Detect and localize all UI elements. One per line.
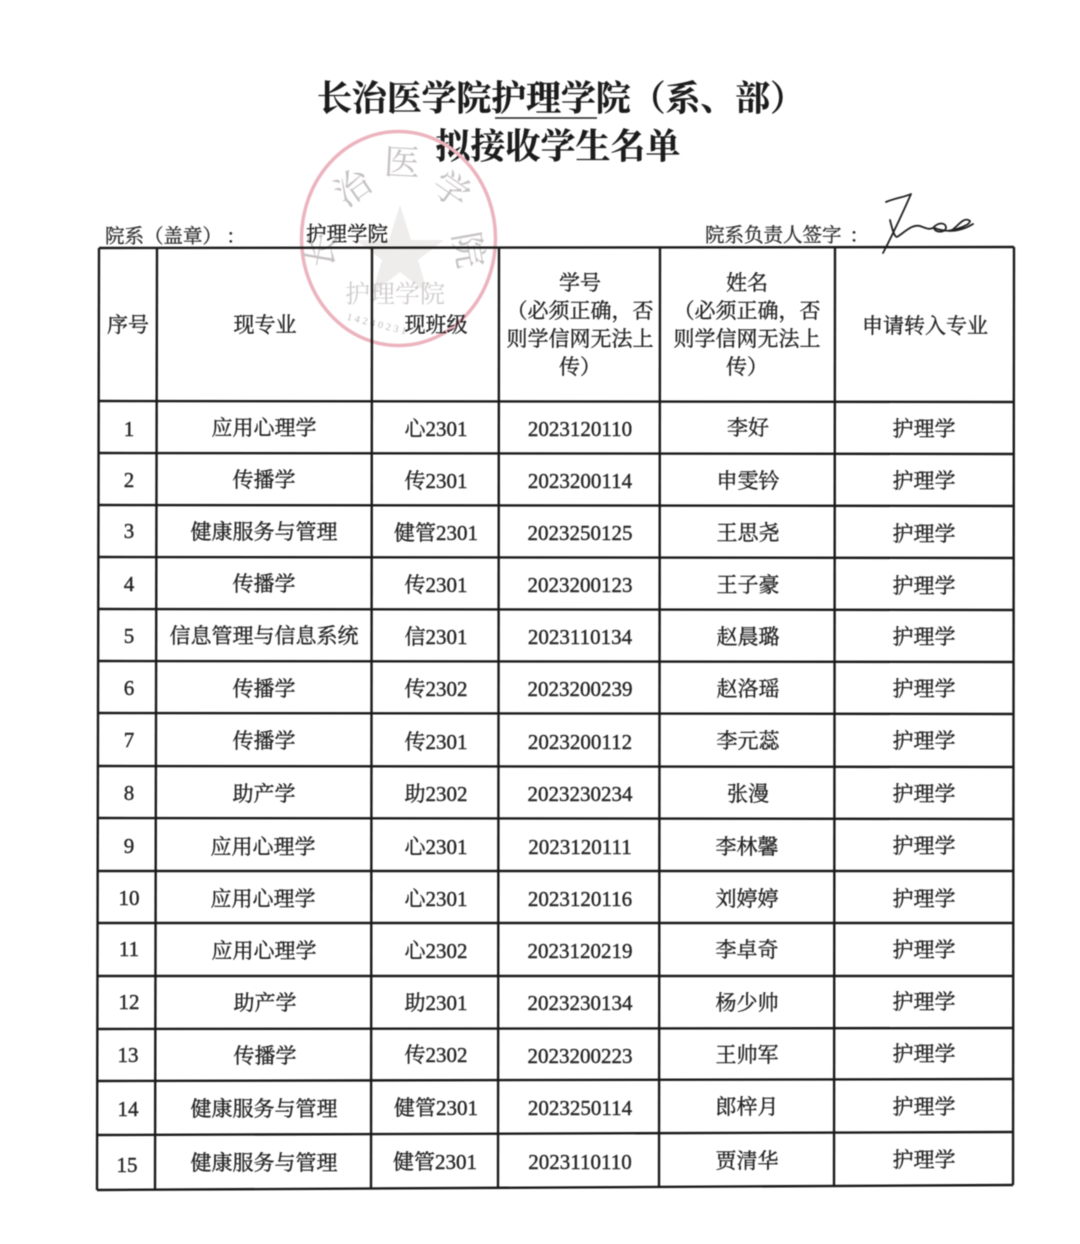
- row 9: [124, 834, 956, 859]
- row 10: 应用心理学: [210, 887, 316, 911]
- row 13: 传播学: [234, 1044, 296, 1068]
- row 2: 传播学: [232, 468, 296, 492]
- row 8: [124, 781, 956, 806]
- row 11: 11: [119, 937, 139, 961]
- row 2: [124, 468, 956, 493]
- signatory label: 院系负责人签字 ：: [705, 224, 869, 246]
- stamp: 长: [299, 229, 345, 271]
- department label: 院系（盖章） ：: [105, 226, 246, 248]
- row 3: 护理学: [892, 522, 956, 546]
- row 4: 传2301: [404, 573, 468, 597]
- row 4: 传播学: [232, 572, 296, 596]
- row 6: 护理学: [892, 677, 956, 701]
- row 8: 2023230234: [528, 782, 633, 806]
- row 11: 应用心理学: [212, 939, 316, 963]
- row 5: 信2301: [404, 625, 468, 649]
- row 9: 护理学: [892, 834, 956, 858]
- row 11: 心2302: [404, 939, 468, 963]
- row 7: 传播学: [232, 729, 296, 753]
- title: [317, 80, 805, 166]
- row 2: 2023200114: [528, 469, 633, 493]
- row 5: 信息管理与信息系统: [170, 624, 358, 648]
- stamp: 医: [383, 142, 421, 184]
- row 12: 助2301: [404, 991, 468, 1015]
- row 8: 张漫: [727, 782, 769, 806]
- row 12: 2023230134: [528, 991, 633, 1015]
- row 13: 2023200223: [528, 1044, 632, 1068]
- row 8: 助2302: [404, 782, 468, 806]
- row 11: 2023120219: [528, 939, 632, 963]
- stamp: 院: [445, 229, 491, 271]
- row 2: 2: [124, 468, 134, 492]
- table header: 学号: [559, 271, 601, 295]
- row 4: 王子豪: [716, 573, 780, 597]
- row 13: 传2302: [404, 1043, 468, 1067]
- table header: （必须正确，否: [674, 299, 820, 324]
- row 11: [119, 937, 956, 963]
- row 6: 赵洛瑶: [716, 677, 780, 701]
- row 3: 健康服务与管理: [190, 520, 338, 544]
- row 8: 8: [124, 781, 134, 805]
- row 14: 2023250114: [528, 1096, 633, 1120]
- row 12: 护理学: [892, 990, 956, 1014]
- stamp: 14240231: [346, 312, 410, 338]
- table header: 则学信网无法上: [506, 327, 654, 351]
- row 6: [124, 676, 956, 701]
- title: 拟接收学生名单: [435, 128, 681, 166]
- row 3: [124, 519, 956, 546]
- row 1: 1: [124, 417, 134, 441]
- row 9: 9: [124, 834, 134, 858]
- row 4: 护理学: [892, 574, 956, 598]
- row 6: 传播学: [232, 677, 296, 701]
- row 7: 传2301: [404, 730, 468, 754]
- row 8: 护理学: [892, 782, 956, 806]
- row 5: 赵晨璐: [716, 625, 780, 649]
- table grid: [97, 247, 1014, 1190]
- stamp: 治: [327, 161, 380, 215]
- row 1: 心2301: [404, 417, 468, 441]
- row 13: 护理学: [892, 1042, 956, 1066]
- department name: 护理学院: [306, 223, 388, 246]
- row 7: 李元蕊: [716, 729, 780, 753]
- row 9: 应用心理学: [210, 835, 316, 859]
- row 13: [118, 1042, 956, 1068]
- table header: 现班级: [404, 313, 468, 337]
- row 10: 刘婷婷: [716, 887, 778, 911]
- row 7: 2023200112: [528, 730, 632, 754]
- row 9: 李林馨: [716, 835, 778, 859]
- row 6: 2023200239: [528, 677, 632, 701]
- row 7: [124, 728, 956, 754]
- table header: 则学信网无法上: [674, 327, 820, 351]
- row 4: [124, 572, 956, 598]
- stamp: 学: [425, 163, 477, 217]
- row 10: [118, 886, 956, 911]
- row 1: 护理学: [892, 417, 956, 441]
- stamp: [299, 132, 496, 346]
- row 5: 护理学: [892, 625, 956, 649]
- row 13: 王帅军: [716, 1043, 778, 1067]
- table header: 传）: [726, 355, 768, 379]
- row 10: 2023120116: [528, 887, 632, 911]
- row 14: 郎梓月: [716, 1095, 778, 1119]
- row 15: [116, 1148, 956, 1177]
- row 3: 2023250125: [528, 521, 632, 545]
- table header: 现专业: [234, 313, 296, 337]
- row 6: 传2302: [404, 677, 468, 701]
- row 14: 健管2301: [394, 1096, 478, 1120]
- row 14: 健康服务与管理: [190, 1097, 338, 1121]
- title: 长治医学院护理学院（系、部）: [317, 80, 805, 118]
- row 11: 护理学: [892, 938, 956, 962]
- row 2: 护理学: [892, 469, 956, 493]
- row 9: 2023120111: [528, 835, 632, 859]
- row 2: 传2301: [404, 469, 468, 493]
- row 3: 3: [124, 519, 134, 543]
- row 8: 助产学: [232, 782, 296, 806]
- row 5: 2023110134: [528, 625, 633, 649]
- table header: 传）: [559, 355, 601, 379]
- row 10: 10: [118, 886, 140, 910]
- row 2: 申雯钤: [716, 469, 780, 493]
- row 4: 2023200123: [528, 573, 632, 597]
- row 11: 李卓奇: [716, 938, 778, 962]
- row 15: 健康服务与管理: [190, 1151, 338, 1175]
- row 15: 护理学: [892, 1148, 956, 1172]
- row 3: 王思尧: [716, 521, 780, 545]
- table header: 序号: [107, 313, 149, 337]
- table header: 姓名: [726, 271, 768, 295]
- row 15: 贾清华: [716, 1149, 778, 1173]
- row 12: 助产学: [234, 991, 296, 1015]
- row 1: 2023120110: [528, 417, 632, 441]
- row 15: 健管2301: [393, 1150, 477, 1174]
- row 1: 应用心理学: [212, 416, 316, 440]
- row 15: 2023110110: [528, 1150, 632, 1174]
- row 9: 心2301: [404, 835, 468, 859]
- row 15: 15: [116, 1153, 138, 1177]
- row 14: 14: [118, 1097, 139, 1121]
- row 12: 杨少帅: [716, 991, 778, 1015]
- row 3: 健管2301: [394, 521, 478, 545]
- row 5: [124, 624, 956, 649]
- row 6: 6: [124, 676, 134, 700]
- row 1: 李好: [727, 416, 769, 440]
- row 12: 12: [118, 990, 140, 1014]
- signature: [883, 194, 973, 253]
- row 12: [118, 990, 956, 1015]
- row 5: 5: [124, 624, 134, 648]
- row 7: 护理学: [892, 729, 956, 753]
- row 10: 心2301: [404, 887, 468, 911]
- table header: （必须正确，否: [506, 299, 654, 324]
- row 7: 7: [124, 728, 134, 752]
- row 14: 护理学: [892, 1095, 956, 1119]
- table header: [107, 271, 988, 379]
- row 1: [124, 416, 956, 441]
- stamp: 护理学院: [345, 280, 445, 308]
- row 10: 护理学: [892, 887, 956, 911]
- row 13: 13: [118, 1043, 138, 1067]
- row 14: [118, 1095, 956, 1121]
- row 4: 4: [124, 572, 135, 596]
- table header: 申请转入专业: [862, 314, 988, 338]
